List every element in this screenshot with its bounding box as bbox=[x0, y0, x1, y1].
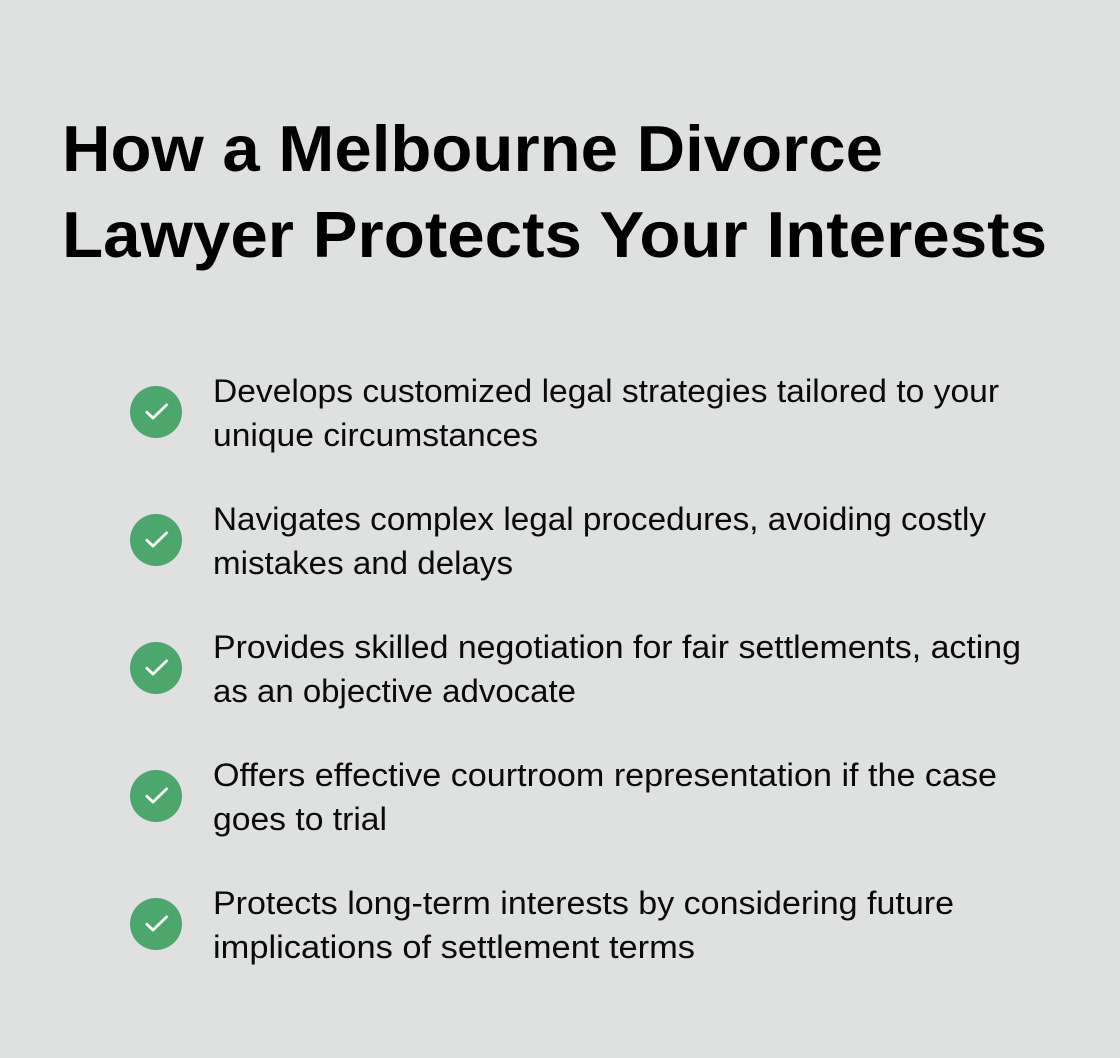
icon: check 3 bbox=[130, 642, 182, 694]
text: item 5: implications of settlement terms bbox=[213, 929, 695, 965]
text: item 2: mistakes and delays bbox=[213, 545, 513, 581]
list item 1 bbox=[130, 373, 999, 453]
icon: check 5 bbox=[130, 898, 182, 950]
text: item 3 bbox=[213, 629, 1021, 709]
list item 5 bbox=[130, 885, 954, 965]
text: item 1 bbox=[213, 373, 999, 453]
text: item 4 bbox=[213, 757, 997, 837]
title bbox=[62, 112, 1047, 271]
icon: check 2 bbox=[130, 514, 182, 566]
list item 4 bbox=[130, 757, 997, 837]
text: item 4: goes to trial bbox=[213, 801, 387, 837]
text: item 3: as an objective advocate bbox=[213, 673, 576, 709]
icon: check 1 bbox=[130, 386, 182, 438]
text: item 5 bbox=[213, 885, 954, 965]
text: item 1: unique circumstances bbox=[213, 417, 538, 453]
list item 2 bbox=[130, 501, 986, 581]
text: item 2: Navigates complex legal procedures, avoiding costly bbox=[213, 501, 986, 537]
text: item 3: Provides skilled negotiation for fair settlements, acting bbox=[213, 629, 1021, 665]
icon: check 4 bbox=[130, 770, 182, 822]
text: item 1: Develops customized legal strategies tailored to your bbox=[213, 373, 999, 409]
title: How a Melbourne Divorce bbox=[62, 112, 883, 185]
text: item 4: Offers effective courtroom representation if the case bbox=[213, 757, 997, 793]
text: item 5: Protects long-term interests by considering future bbox=[213, 885, 954, 921]
list item 3 bbox=[130, 629, 1021, 709]
text: item 2 bbox=[213, 501, 986, 581]
title: Lawyer Protects Your Interests bbox=[62, 198, 1047, 271]
